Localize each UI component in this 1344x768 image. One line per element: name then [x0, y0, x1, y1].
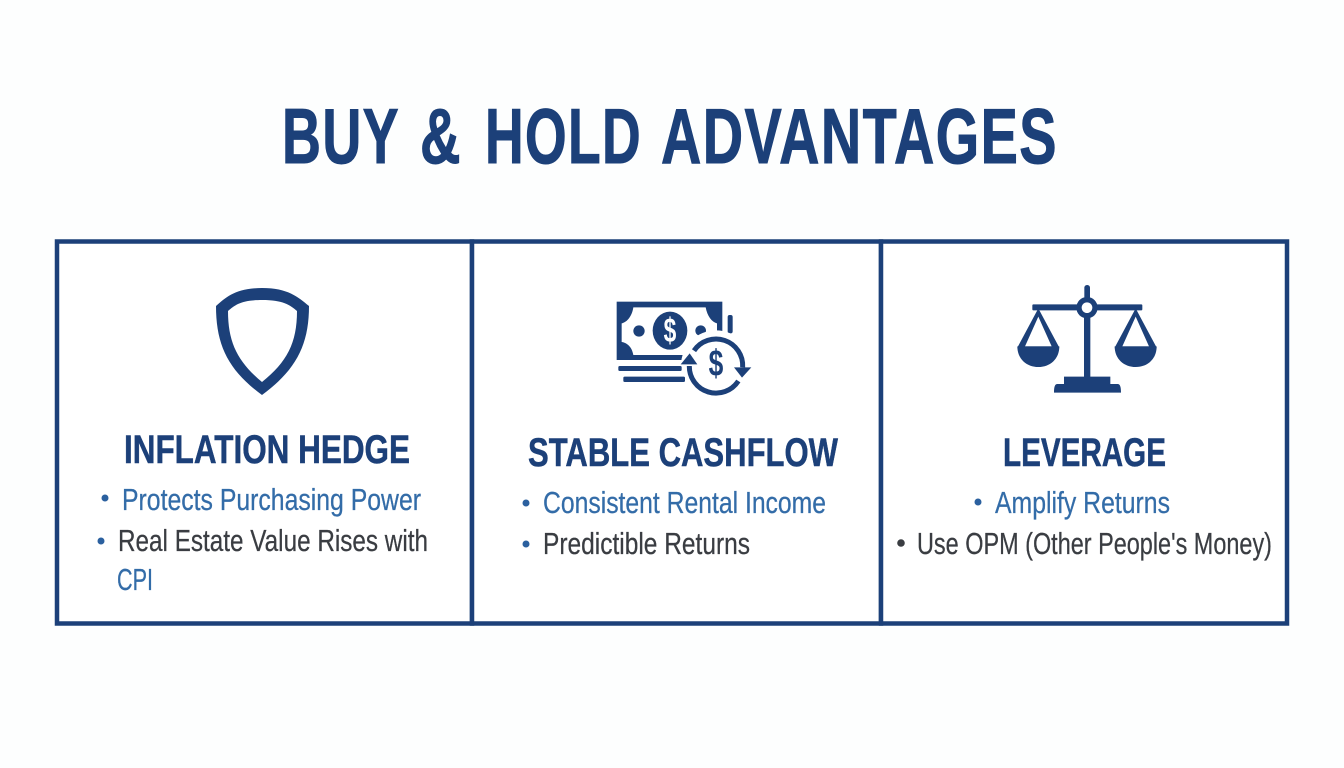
- panel: stable cashflow: [522, 302, 838, 561]
- icon: cash with cycle arrows: $: [709, 342, 723, 384]
- icon: cash with cycle arrows: [617, 302, 751, 400]
- bullet: real estate value rises with CPI: CPI: [117, 563, 153, 597]
- panel: inflation hedge: [98, 288, 428, 597]
- icon: shield: [216, 288, 309, 395]
- panel frame: [57, 242, 1287, 624]
- panel: leverage: [897, 285, 1272, 561]
- heading: inflation hedge: INFLATION HEDGE: [124, 428, 410, 472]
- heading: leverage: LEVERAGE: [1003, 431, 1166, 475]
- bullet: amplify returns: Amplify Returns: [995, 486, 1170, 520]
- title: HOLD: [485, 92, 642, 180]
- bullet: real estate value rises with CPI: Real Estate Value Rises with: [118, 524, 428, 558]
- bullet: real estate value rises with CPI: [98, 524, 428, 597]
- bullet: consistent rental income: Consistent Rental Income: [543, 486, 826, 520]
- icon: cash with cycle arrows: $: [664, 312, 676, 350]
- title: ADVANTAGES: [661, 92, 1058, 180]
- heading: stable cashflow: STABLE CASHFLOW: [528, 431, 838, 475]
- title: BUY: [282, 92, 400, 180]
- bullet: protects purchasing power: Protects Purchasing Power: [122, 483, 421, 517]
- bullet: predictible returns: Predictible Returns: [543, 527, 750, 561]
- title: &: [420, 92, 462, 180]
- icon: balance scale: [1017, 285, 1157, 393]
- title: [282, 92, 1058, 180]
